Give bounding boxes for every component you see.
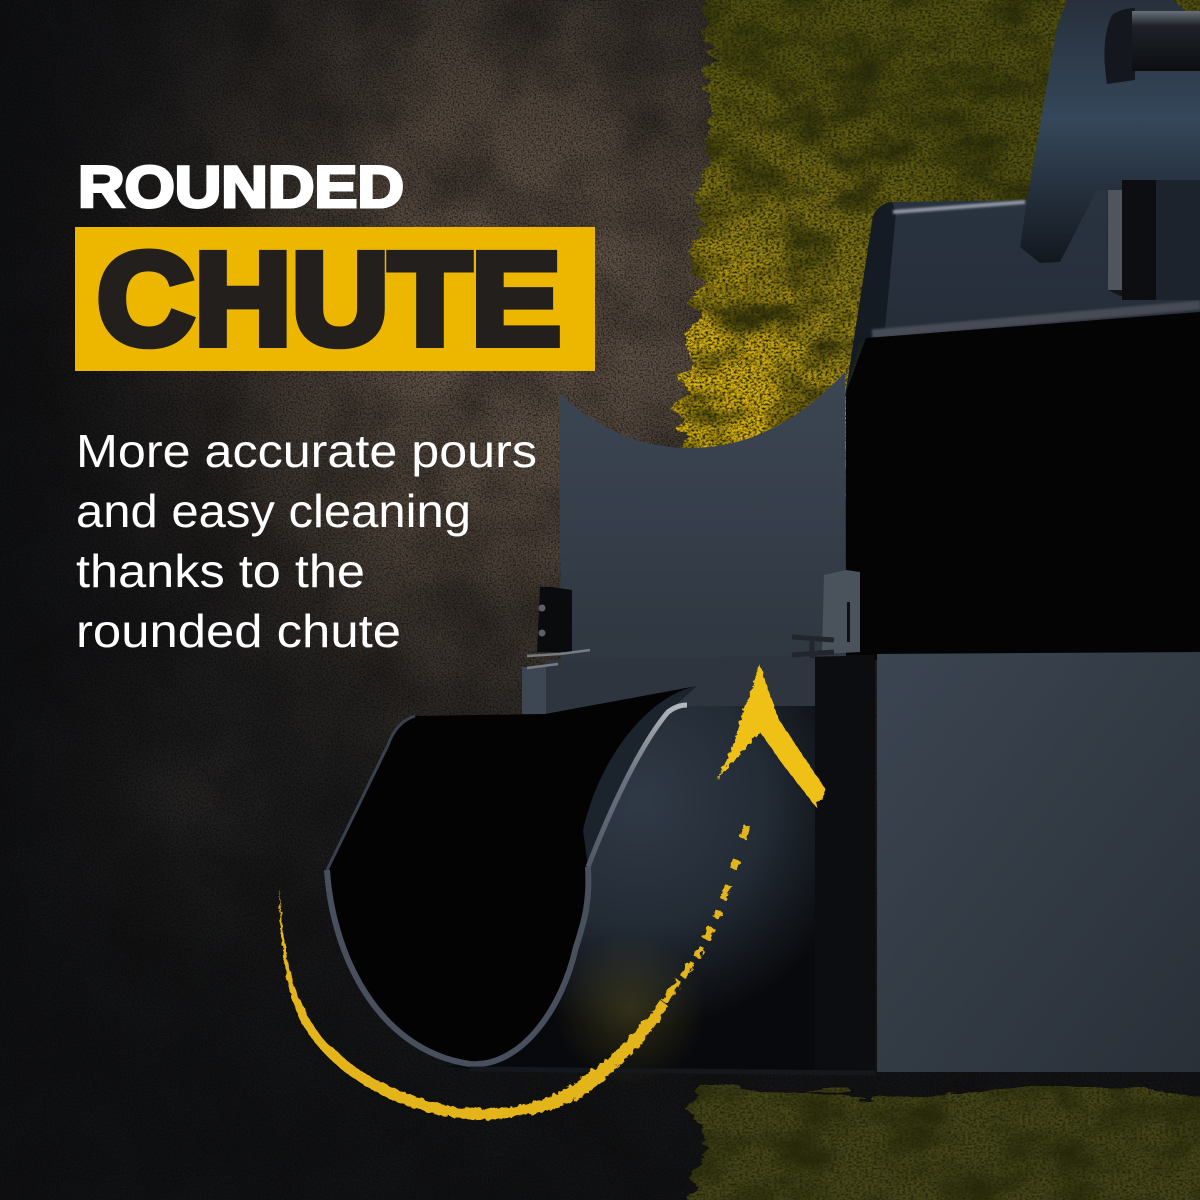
description text: rounded chute	[76, 605, 401, 657]
arrow curve, solid part	[280, 888, 668, 1120]
right latch	[792, 570, 860, 658]
left latch	[522, 587, 590, 714]
olive paint texture, bottom right	[690, 1092, 1200, 1200]
chute side face	[442, 706, 815, 1072]
chute rim, lower	[327, 867, 588, 1064]
yellow hand-drawn arrow	[280, 665, 826, 1120]
mounting bracket and pin	[1020, 0, 1200, 300]
arrow head	[717, 665, 826, 807]
description text: and easy cleaning	[76, 485, 471, 537]
bucket upper body	[845, 178, 1200, 660]
gate plate with rounded cutout	[559, 372, 846, 662]
lower right panel	[877, 652, 1200, 1072]
chute rounded interior, black	[327, 686, 697, 1064]
description text: thanks to the	[76, 545, 365, 597]
description text: More accurate pours	[76, 425, 537, 477]
chute rim, upper left	[327, 716, 415, 870]
chute rim, upper right	[588, 705, 687, 867]
arrow curve, broken part	[664, 818, 750, 1002]
lower collar	[545, 656, 815, 716]
side column	[815, 655, 875, 1072]
yellow paint texture, top right	[680, 0, 1200, 500]
title: ROUNDED: ROUNDED	[78, 155, 404, 220]
title block: CHUTE on yellow: CHUTE	[97, 225, 561, 372]
chute tube recess	[583, 686, 697, 867]
warm reflection on chute face	[555, 935, 705, 1085]
description text	[76, 425, 537, 657]
bottom edge of machine	[470, 1069, 875, 1073]
machine: bucket illustration	[327, 0, 1200, 1085]
